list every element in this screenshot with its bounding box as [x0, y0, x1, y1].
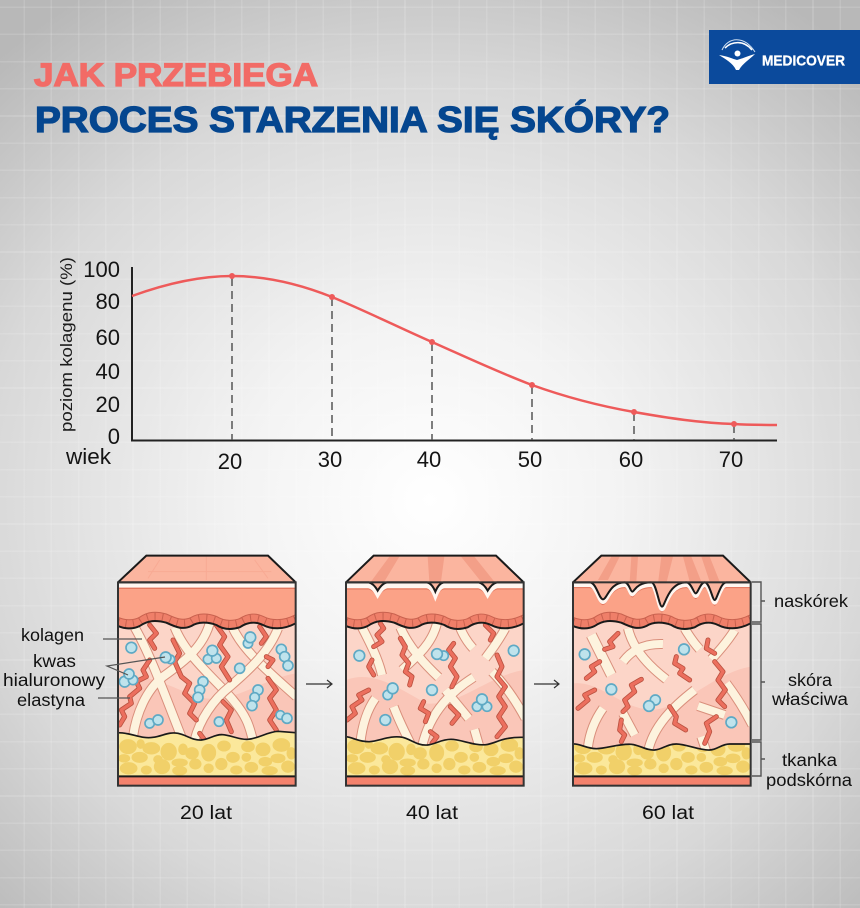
label: elastyna: elastyna: [17, 690, 85, 710]
label: kwas hialuronowy: hialuronowy: [3, 670, 105, 690]
y axis labels: 100: [83, 257, 120, 282]
label: tkanka podskórna: tkanka: [782, 750, 837, 770]
age caption: 40 lat: 40 lat: [406, 803, 459, 824]
label: kwas hialuronowy: [3, 651, 105, 690]
subcutaneous fat layer: [119, 730, 295, 776]
left labels and leader lines: [3, 625, 165, 710]
x axis title: wiek: [65, 444, 112, 469]
y axis labels: 20: [96, 392, 120, 417]
label: skóra właściwa: [771, 670, 848, 709]
logo: Medicover: [709, 30, 860, 84]
label: tkanka podskórna: [766, 750, 852, 790]
y axis labels: 80: [96, 289, 120, 314]
skin surface with deep wrinkles: [573, 556, 751, 607]
hypodermis base: [118, 776, 296, 786]
y axis title: poziom kolagenu (%): [57, 257, 76, 432]
title: [34, 57, 670, 140]
collagen fibers: [588, 628, 752, 752]
line chart: collagen level by age: [57, 257, 777, 474]
leader lines: [98, 639, 165, 698]
subcutaneous fat layer: [574, 743, 750, 776]
elastin fibers: [347, 623, 505, 743]
x axis labels: 40: [417, 447, 441, 472]
label: kwas hialuronowy: kwas: [33, 651, 76, 671]
arrow: 20 to 40 years: [306, 680, 332, 688]
icon: Medicover figure: [719, 40, 755, 70]
epidermis layer: [573, 582, 751, 629]
skin diagram: 40 years: [346, 556, 525, 786]
y axis labels: [83, 257, 120, 449]
data points: [229, 273, 737, 427]
collagen fibers: [133, 623, 296, 740]
brackets: [752, 582, 765, 776]
collagen curve: [132, 276, 777, 425]
epidermis layer: [118, 582, 296, 629]
dashed age markers: [232, 278, 734, 440]
label: naskórek: naskórek: [774, 591, 848, 611]
label: kolagen: kolagen: [21, 625, 84, 645]
collagen fibers: [360, 623, 525, 747]
y axis labels: 60: [96, 325, 120, 350]
x axis labels: 30: [318, 447, 342, 472]
elastin fibers: [120, 625, 276, 740]
label: skóra właściwa: właściwa: [771, 689, 848, 709]
x axis labels: 50: [518, 447, 542, 472]
y axis labels: 40: [96, 359, 120, 384]
x axis labels: 20: [218, 449, 242, 474]
logo: Medicover: MEDICOVER: [762, 54, 845, 70]
skin diagram: 60 years: [573, 556, 752, 786]
x axis labels: 70: [719, 447, 743, 472]
title: JAK PRZEBIEGA: [34, 57, 318, 93]
skin surface: [118, 556, 296, 582]
hypodermis base: [573, 776, 751, 786]
arrow: 40 to 60 years: [534, 680, 559, 688]
label: skóra właściwa: skóra: [788, 670, 832, 690]
age caption: 20 lat: 20 lat: [180, 803, 233, 824]
hypodermis base: [346, 776, 524, 786]
y axis labels: 0: [108, 424, 120, 449]
x axis labels: 60: [619, 447, 643, 472]
subcutaneous fat layer: [347, 736, 523, 776]
hyaluronic acid molecules: [354, 645, 519, 725]
hyaluronic acid molecules: [119, 632, 293, 728]
right brackets and layer labels: [752, 582, 852, 790]
epidermis layer: [346, 582, 524, 629]
title: PROCES STARZENIA SIĘ SKÓRY?: [35, 98, 670, 140]
skin surface with shallow wrinkles: [346, 556, 524, 592]
skin diagram: 20 years: [118, 556, 296, 786]
axes: [132, 267, 777, 440]
hyaluronic acid molecules: [579, 644, 737, 728]
x axis labels: [218, 447, 743, 474]
elastin fibers: [578, 633, 725, 743]
label: tkanka podskórna: podskórna: [766, 770, 852, 790]
age caption: 60 lat: 60 lat: [642, 803, 695, 824]
